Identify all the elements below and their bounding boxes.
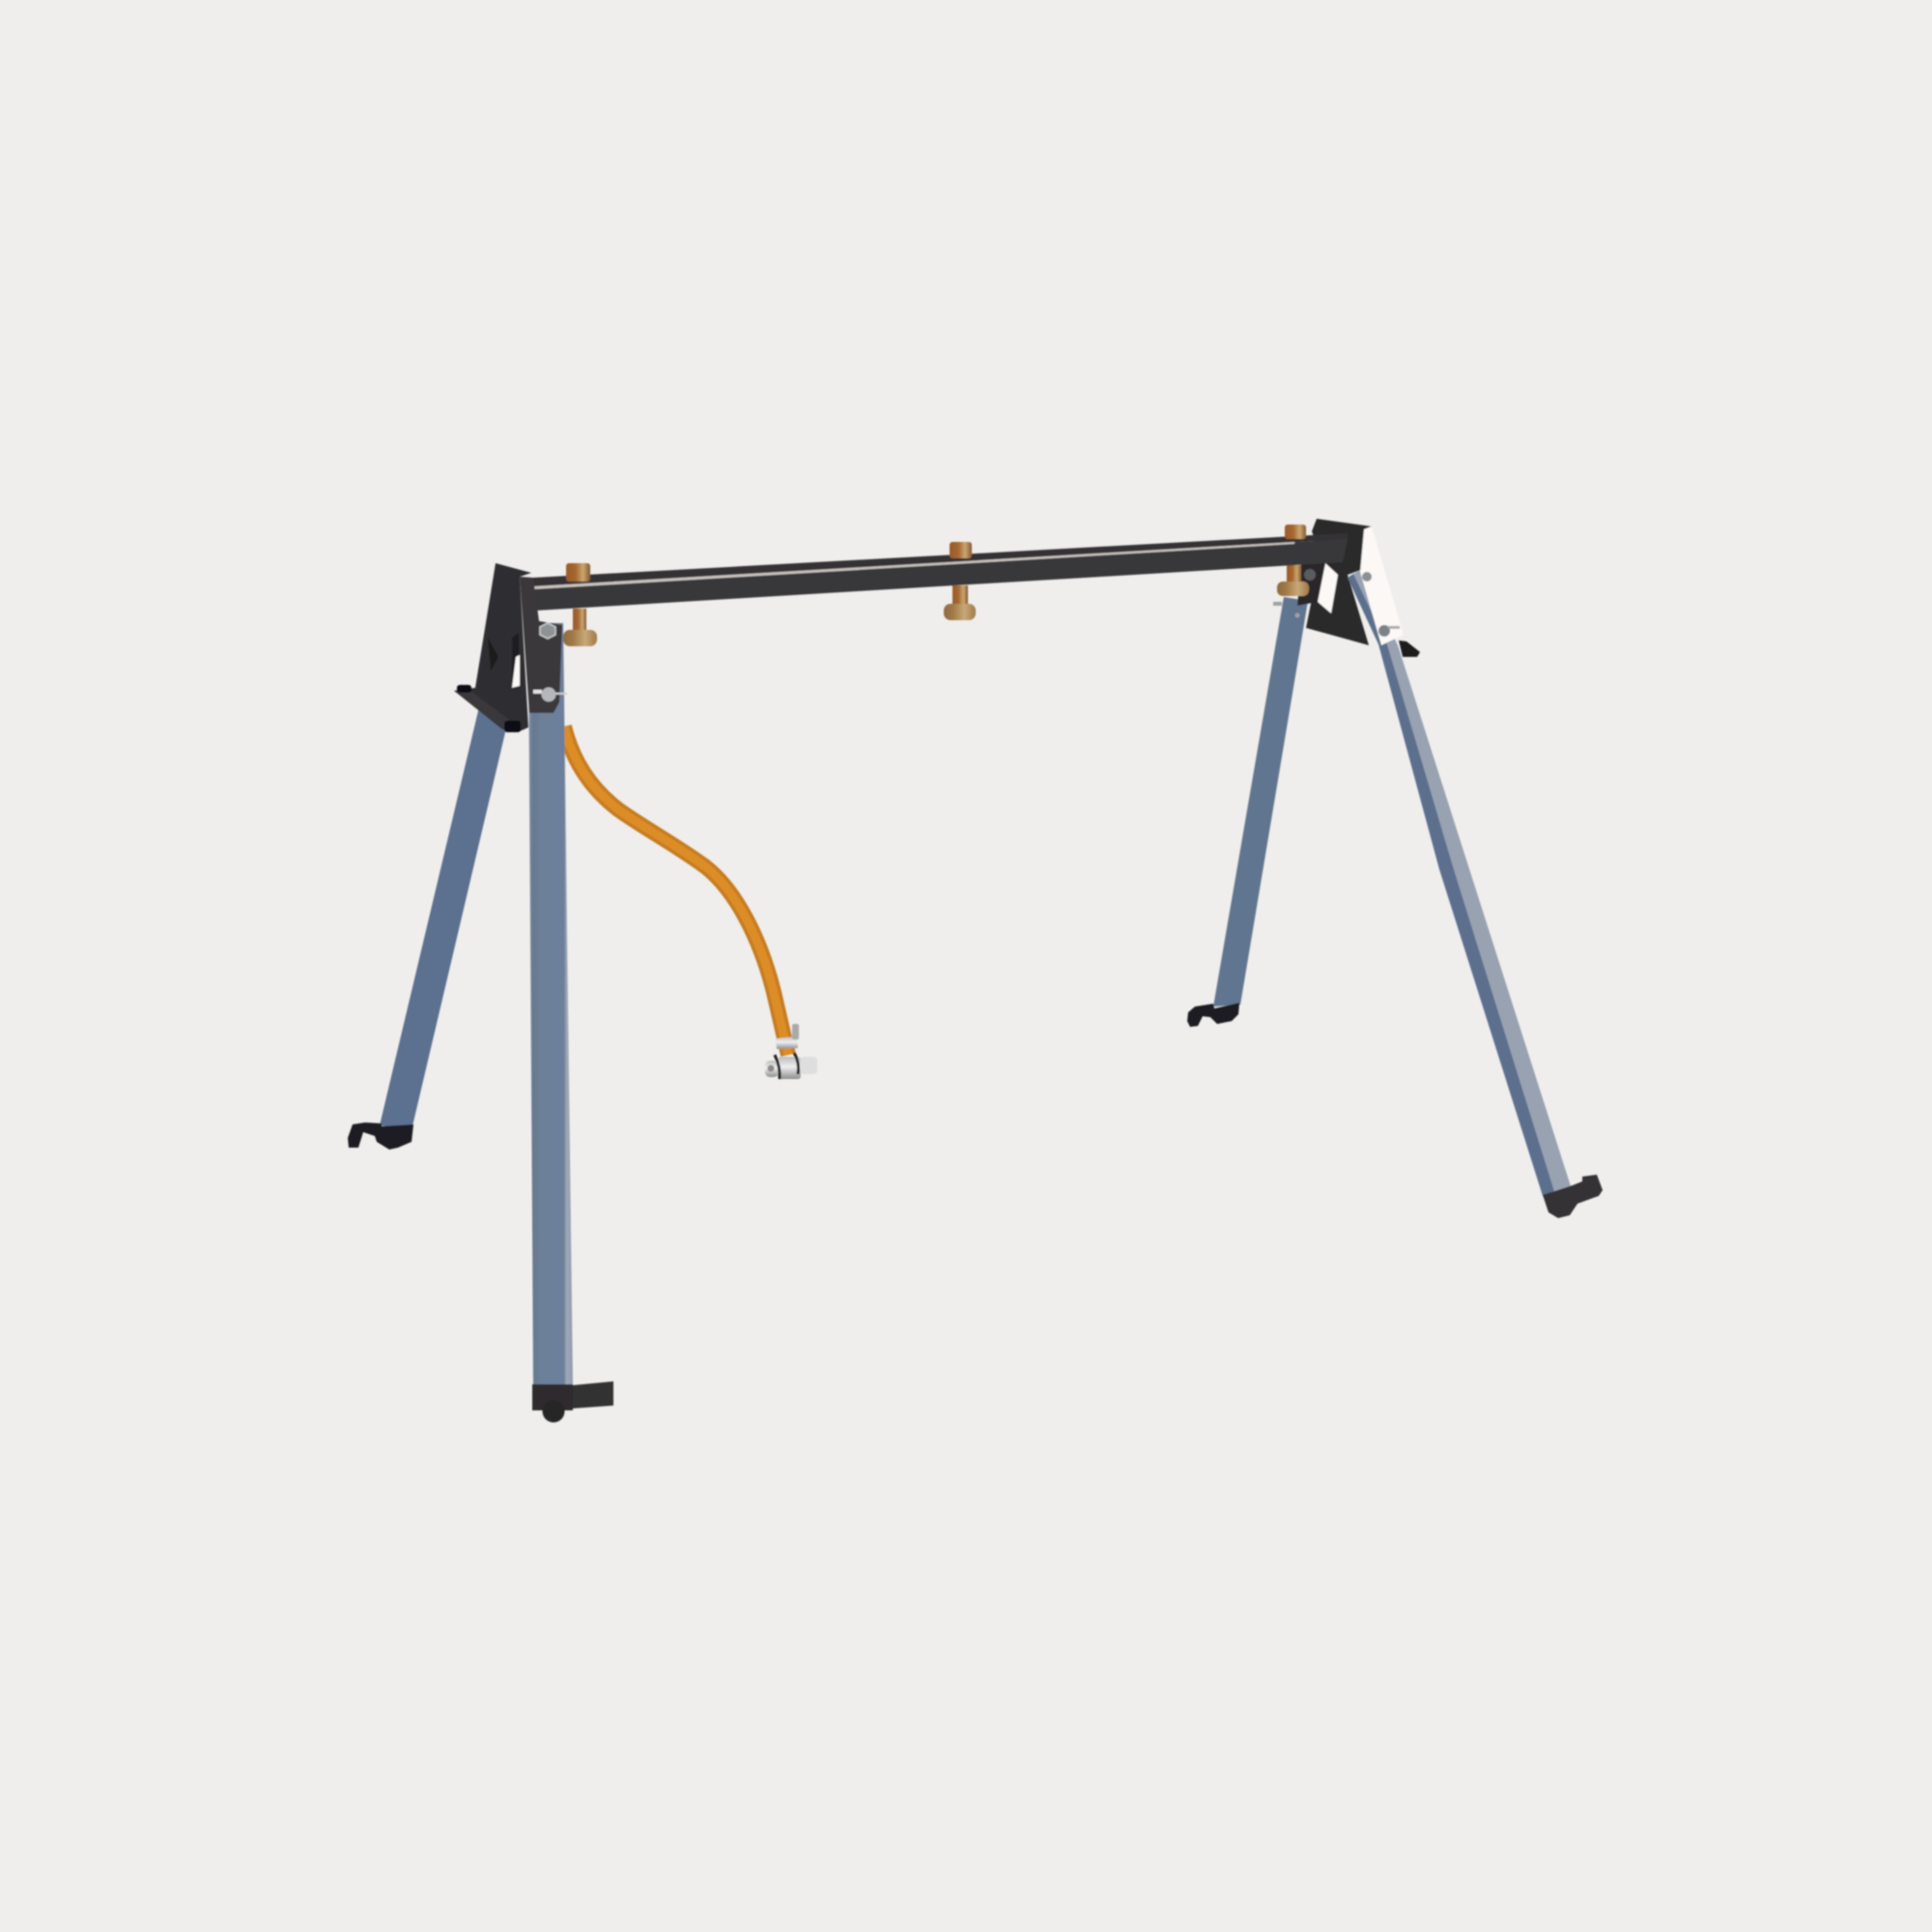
brass cap: middle — [950, 542, 972, 558]
hose clamp — [776, 1024, 799, 1049]
right front leg — [1348, 570, 1603, 1218]
cross beam — [533, 533, 1348, 611]
foot: back left — [348, 1122, 413, 1150]
back right leg — [1187, 597, 1308, 1027]
left bracket: window — [488, 633, 520, 688]
brass knob: middle stem and foot — [944, 585, 976, 620]
right bolts — [1273, 569, 1400, 637]
front left leg — [528, 623, 613, 1422]
brass knob: left stem and foot — [563, 609, 597, 646]
brass knob: right — [1277, 565, 1309, 596]
right bracket: inner white plate — [1318, 563, 1338, 613]
brass cap: right — [1285, 525, 1306, 539]
foot: front right — [1543, 1175, 1603, 1218]
back left leg — [348, 691, 514, 1150]
foot: front left — [532, 1381, 613, 1422]
right bracket: dark plate — [1306, 519, 1372, 645]
right bracket: bolt plate — [1297, 563, 1325, 606]
left bracket: flange — [454, 685, 522, 732]
brass cap: left — [566, 563, 590, 582]
foot: back right — [1187, 1003, 1239, 1027]
right bracket: white plate — [1360, 526, 1404, 645]
wing bolt — [533, 688, 567, 701]
right bracket: lower flange — [1399, 640, 1420, 657]
left bracket: side plate — [454, 563, 531, 731]
hex nut — [540, 623, 555, 639]
hose fitting — [765, 1053, 817, 1079]
hose — [564, 726, 788, 1055]
left bracket: front plate — [520, 577, 562, 713]
